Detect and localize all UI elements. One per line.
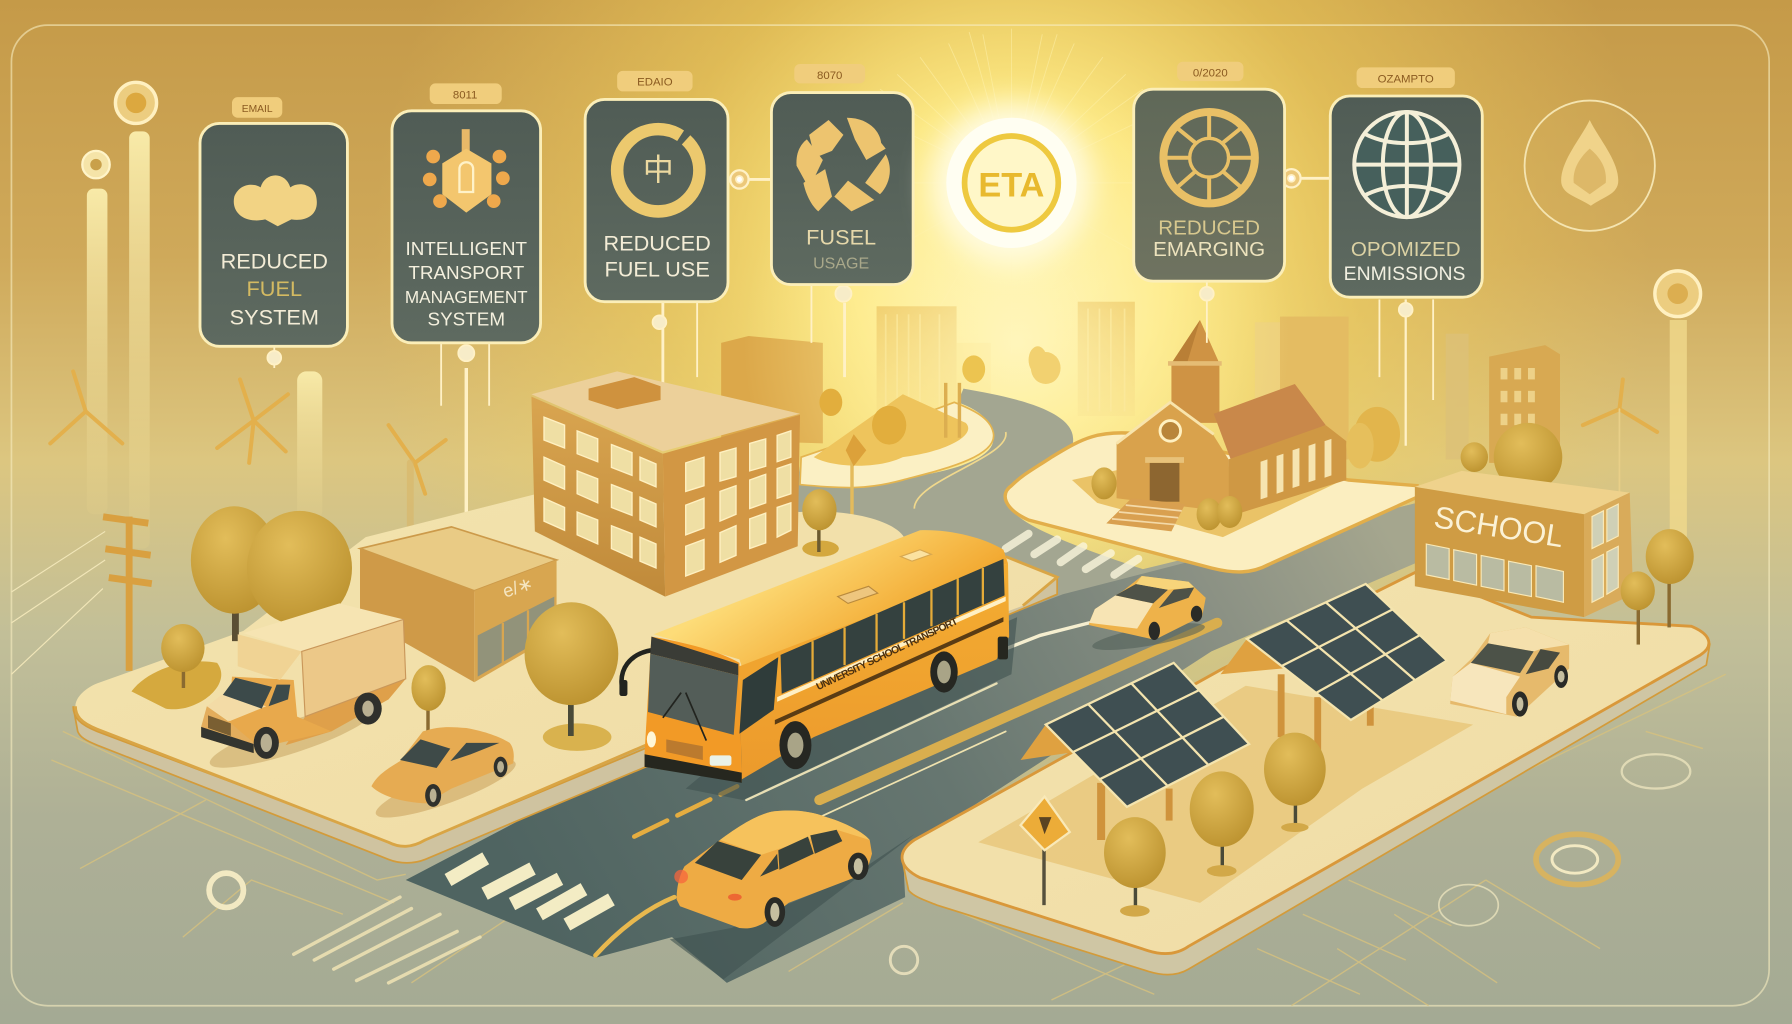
panel text: REDUCED bbox=[603, 230, 711, 255]
left trees bbox=[161, 506, 618, 736]
icon: ring gauge bbox=[617, 129, 699, 211]
panel text: SYSTEM bbox=[230, 305, 319, 330]
road sign bbox=[1021, 797, 1070, 905]
back road signs and trees bbox=[846, 346, 1061, 544]
icon: gear bulb bbox=[423, 129, 510, 213]
front orange car bbox=[670, 811, 914, 979]
panel text: REDUCED bbox=[1158, 216, 1260, 239]
solar array 2 bbox=[1221, 584, 1447, 752]
delivery truck bbox=[201, 603, 406, 779]
church bbox=[1072, 320, 1346, 537]
left pillar beacons bbox=[82, 82, 322, 549]
pill label: 8011 bbox=[453, 89, 477, 101]
panel text: FUEL USE bbox=[604, 257, 710, 282]
panel text: EMARGING bbox=[1153, 238, 1265, 261]
painted ground stripes bbox=[294, 897, 480, 983]
panel text: TRANSPORT bbox=[408, 262, 525, 283]
solar array 1 bbox=[1021, 663, 1249, 840]
sun rays bbox=[857, 29, 1166, 354]
icon: globe bbox=[1354, 112, 1459, 217]
school sign: SCHOOL bbox=[1432, 499, 1566, 554]
icon: cloud bbox=[234, 175, 317, 226]
road markings bbox=[595, 623, 1217, 955]
right pillar beacon bbox=[1655, 271, 1701, 537]
ground icons bbox=[209, 754, 1690, 974]
panel text: SYSTEM bbox=[428, 309, 505, 330]
right small trees bbox=[1621, 529, 1694, 645]
small tree by building bbox=[802, 489, 839, 557]
panel: reduced fuel system bbox=[200, 97, 347, 346]
church trees bbox=[1091, 407, 1562, 530]
main road bbox=[406, 503, 1423, 983]
right platform trees bbox=[1104, 733, 1326, 917]
panel text: REDUCED bbox=[221, 249, 328, 274]
church island platform bbox=[1005, 433, 1417, 572]
pill label: EMAIL bbox=[242, 104, 273, 115]
crosswalk back bbox=[1006, 534, 1138, 575]
shop box building bbox=[360, 527, 557, 682]
utility pole bbox=[11, 513, 152, 674]
road car bbox=[1089, 576, 1206, 655]
panel: intelligent transport management system bbox=[392, 83, 541, 343]
sandy garden patches bbox=[131, 661, 1473, 903]
pill label: 0/2020 bbox=[1193, 68, 1228, 80]
ground contour lines bbox=[51, 674, 1726, 1006]
panel text: OPOMIZED bbox=[1351, 238, 1461, 261]
yellow school bus bbox=[619, 530, 1017, 800]
panel: fuel usage bbox=[771, 64, 913, 285]
school building bbox=[1415, 471, 1633, 617]
panel: reduced emissions bbox=[1134, 62, 1285, 281]
pill label: EDAIO bbox=[637, 77, 673, 89]
crosswalk front bbox=[448, 858, 611, 925]
left platform bbox=[73, 494, 1057, 863]
icon: recycle ring bbox=[796, 118, 890, 211]
sunlit haze bbox=[743, 69, 1291, 617]
icon: fuel drop circle bbox=[1525, 101, 1655, 231]
small parked car bbox=[371, 727, 521, 828]
panel text: MANAGEMENT bbox=[405, 287, 528, 307]
shop box building: e/∗ bbox=[500, 572, 535, 602]
panel: reduced fuel use bbox=[585, 71, 728, 302]
panel text: USAGE bbox=[813, 256, 869, 273]
ETA sun badge bbox=[931, 103, 1091, 263]
right platform bbox=[902, 571, 1710, 975]
road centre line bbox=[914, 432, 1006, 509]
pale suv bbox=[1450, 627, 1569, 717]
ETA text: ETA bbox=[978, 167, 1044, 205]
distant city skyline bbox=[721, 302, 1560, 463]
central brick building bbox=[531, 371, 800, 597]
bus lettering: UNIVERSITY SCHOOL TRANSPORT bbox=[815, 616, 961, 693]
panel: optimized emissions bbox=[1330, 67, 1482, 297]
panel text: FUSEL bbox=[806, 225, 876, 250]
panel text: ENMISSIONS bbox=[1344, 263, 1466, 285]
icon: gear ring bbox=[1163, 112, 1255, 203]
curved back road bbox=[789, 389, 1417, 617]
pill label: 8070 bbox=[817, 70, 842, 82]
connector pins bbox=[267, 169, 1433, 526]
pill label: OZAMPTO bbox=[1378, 73, 1434, 85]
panel text: FUEL bbox=[247, 276, 302, 301]
upper mid platform bbox=[800, 389, 994, 488]
icon: ring gauge: 中 bbox=[643, 153, 674, 188]
wind turbines bbox=[50, 371, 1657, 537]
panel text: INTELLIGENT bbox=[406, 238, 528, 259]
